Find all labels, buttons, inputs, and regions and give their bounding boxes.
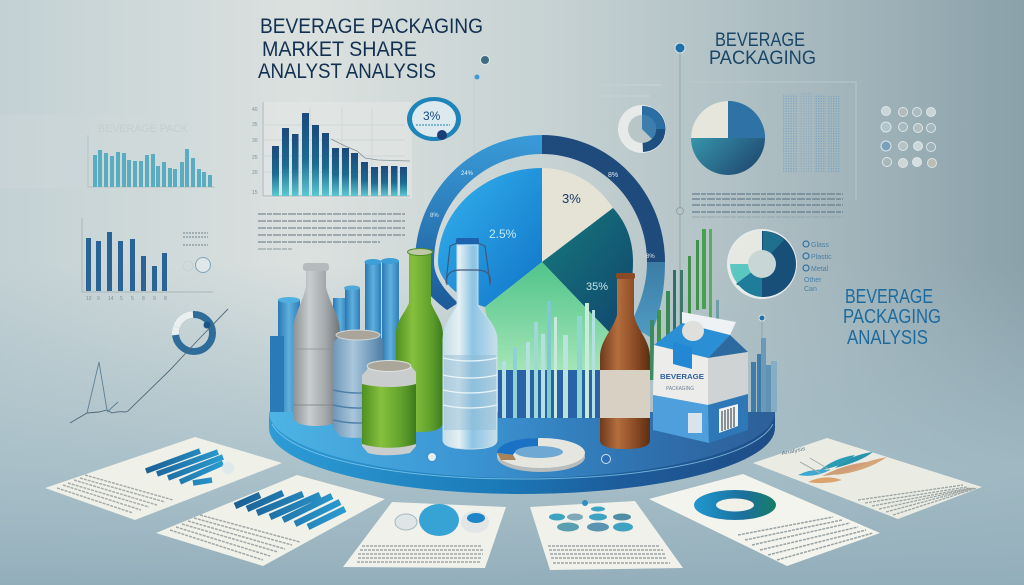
heading: beverage packaging analysis xyxy=(843,286,941,349)
heading: beverage packaging analysis: BEVERAGE xyxy=(845,286,933,308)
main bar chart xyxy=(252,102,412,198)
percentage badge xyxy=(407,97,461,141)
platform nodes xyxy=(428,452,610,464)
bar chart: mid left: 8 xyxy=(164,296,167,302)
blue can xyxy=(333,330,383,438)
main bar chart: 25 xyxy=(252,155,258,161)
heading: beverage packaging: PACKAGING xyxy=(709,48,816,69)
pie labels: 35% xyxy=(586,281,608,293)
pie labels: 3% xyxy=(562,191,581,206)
small chart behind carton xyxy=(751,338,777,412)
main bar chart: 15 xyxy=(252,190,258,196)
heading: beverage packaging xyxy=(709,30,816,69)
silver bottle xyxy=(293,263,340,426)
report: circle icons xyxy=(343,502,506,568)
bar chart: mid left: 5 xyxy=(120,296,123,302)
large pie chart xyxy=(415,135,665,375)
donut legend: Metal xyxy=(811,266,829,273)
bar chart: mid left: 9 xyxy=(97,296,100,302)
green can xyxy=(362,360,416,455)
pie labels xyxy=(430,171,655,293)
percentage badge: 3% xyxy=(423,109,441,123)
bar chart: mid left xyxy=(82,218,213,302)
text block: left xyxy=(258,214,405,249)
pie labels: 8% xyxy=(608,172,618,179)
faded bar chart: top left xyxy=(0,115,215,188)
report: icon grid xyxy=(530,500,683,570)
donut legend: Can xyxy=(804,286,817,293)
main bar chart: 20 xyxy=(252,170,258,176)
bar chart: mid left: 14 xyxy=(108,296,114,302)
donut legend: Plastic xyxy=(811,254,832,261)
report: area chart: Analysis xyxy=(781,446,807,457)
pie labels: 24% xyxy=(461,171,474,177)
bar chart: mid left: 5 xyxy=(131,296,134,302)
dotted chart xyxy=(782,92,840,172)
brown bottle xyxy=(600,273,650,449)
title: MARKET SHARE xyxy=(262,38,417,61)
back cylinders xyxy=(270,258,399,412)
pie labels: 2.5% xyxy=(489,227,517,241)
pie chart: top right xyxy=(691,101,765,175)
report: area chart xyxy=(753,438,982,519)
bar chart: mid left: 10 xyxy=(86,296,92,302)
milk carton: BEVERAGE xyxy=(660,374,704,381)
green bottle xyxy=(396,248,443,432)
outer ring xyxy=(415,135,665,337)
main bar chart: 35 xyxy=(252,122,258,128)
green bar chart xyxy=(650,229,719,380)
milk carton xyxy=(653,312,748,443)
icon grid xyxy=(881,106,936,168)
text block: right xyxy=(692,194,843,217)
clear glass bottle xyxy=(443,238,497,449)
heading: beverage packaging: BEVERAGE xyxy=(715,30,805,51)
pie labels: 8% xyxy=(430,213,439,219)
main bar chart: 30 xyxy=(252,138,258,144)
donut legend xyxy=(803,241,832,293)
small donut: top xyxy=(618,105,666,153)
bar chart: mid left: 9 xyxy=(153,296,156,302)
heading: beverage packaging analysis: PACKAGING xyxy=(843,306,941,328)
main bar chart: 40 xyxy=(252,107,258,113)
title xyxy=(258,15,483,83)
bar chart: mid left: 8 xyxy=(142,296,145,302)
title: BEVERAGE PACKAGING xyxy=(260,15,483,38)
front bar chart xyxy=(498,301,600,418)
pie labels: 8% xyxy=(646,254,655,260)
ring on platform xyxy=(497,438,585,472)
panel lines and connector nodes xyxy=(600,43,856,350)
donut with trend line xyxy=(70,309,228,423)
platform xyxy=(269,412,775,494)
report: striped chart xyxy=(45,437,282,520)
report: donut xyxy=(649,474,880,566)
report: bar chart xyxy=(156,475,385,566)
faded bar chart: top left: BEVERAGE PACK xyxy=(98,123,189,135)
title: ANALYST ANALYSIS xyxy=(258,60,436,83)
donut chart: right xyxy=(727,229,797,299)
donut legend: Other xyxy=(804,277,822,284)
donut legend: Glass xyxy=(811,242,829,249)
milk carton: PACKAGING xyxy=(666,386,694,392)
heading: beverage packaging analysis: ANALYSIS xyxy=(847,327,928,349)
connector node: top xyxy=(474,56,490,170)
pie slices xyxy=(438,168,633,375)
